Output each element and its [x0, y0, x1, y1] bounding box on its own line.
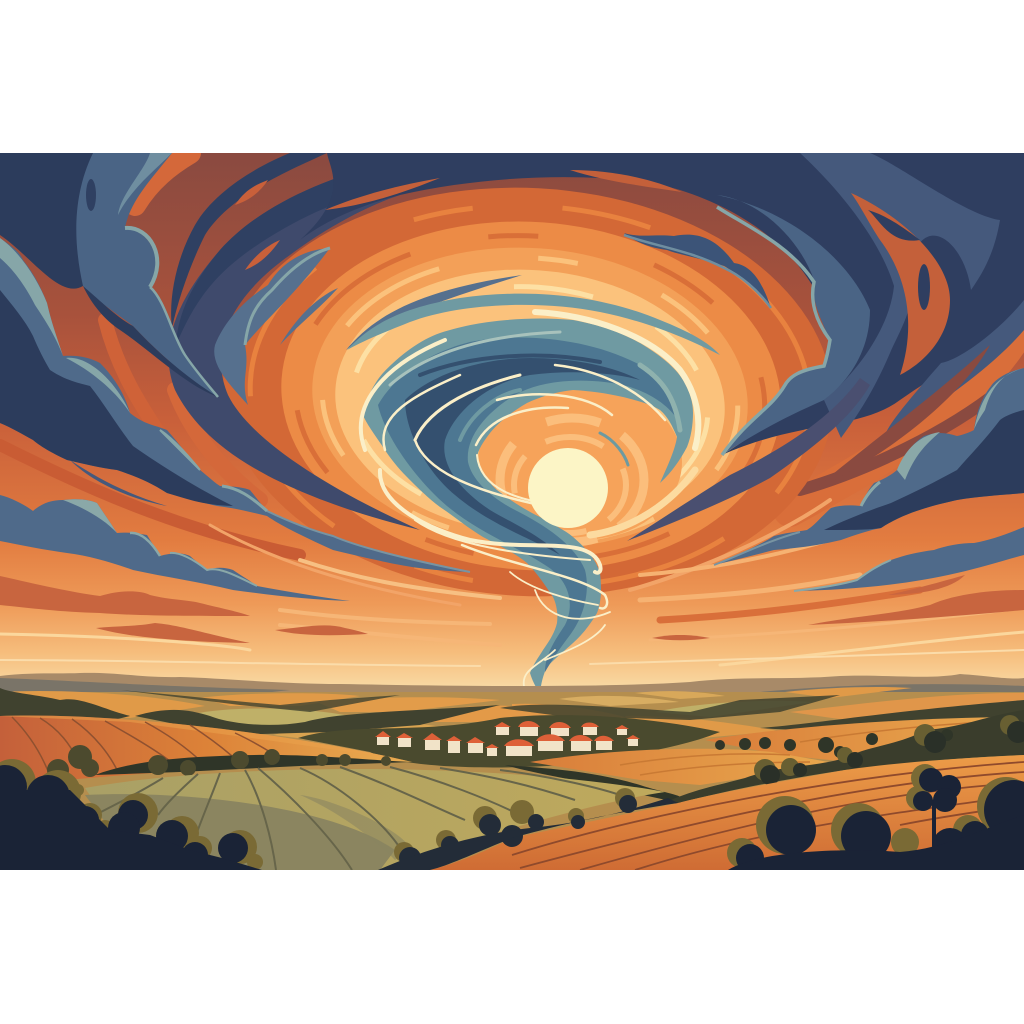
far fields [0, 687, 1024, 742]
funnel outer teal sweep [347, 294, 720, 355]
village [298, 715, 720, 767]
distant hills [0, 672, 1024, 692]
upper-left navy cloud [0, 153, 218, 397]
sun halo inside the funnel [478, 384, 695, 542]
upper middle cloud wisps [214, 248, 522, 405]
top navy swirl band [300, 153, 1024, 455]
navy stripes left of swirl [169, 153, 420, 530]
swirl rings around the sun [223, 188, 825, 596]
lower-left cloud [0, 495, 350, 601]
sky gradient [0, 153, 1024, 693]
illustration: tornado over farmland at sunset [0, 153, 1024, 870]
upper right cloud with pale rim [624, 195, 870, 455]
ground base [0, 692, 1024, 870]
purple streak right of swirl [627, 345, 990, 541]
foreground olive field [85, 767, 665, 870]
foreground left bushes [0, 759, 263, 870]
foreground orange field [430, 755, 1024, 870]
tornado cream swirl lines [361, 312, 698, 690]
tornado funnel [362, 318, 693, 693]
right storm clouds [714, 368, 1024, 591]
distant pink clouds [0, 575, 1024, 643]
far tree lines [0, 688, 1024, 735]
mid-right fields [530, 717, 1010, 785]
lower sky streaks [0, 500, 1024, 666]
foreground right bushes and tree [727, 764, 1024, 872]
centre foreground tree line [378, 788, 678, 870]
orange sky arcs outside the swirl [0, 153, 1024, 555]
left large storm cloud [0, 238, 470, 572]
sun disc [528, 448, 608, 528]
mid-left orange field [0, 716, 412, 782]
mid tree lines [47, 710, 1024, 805]
